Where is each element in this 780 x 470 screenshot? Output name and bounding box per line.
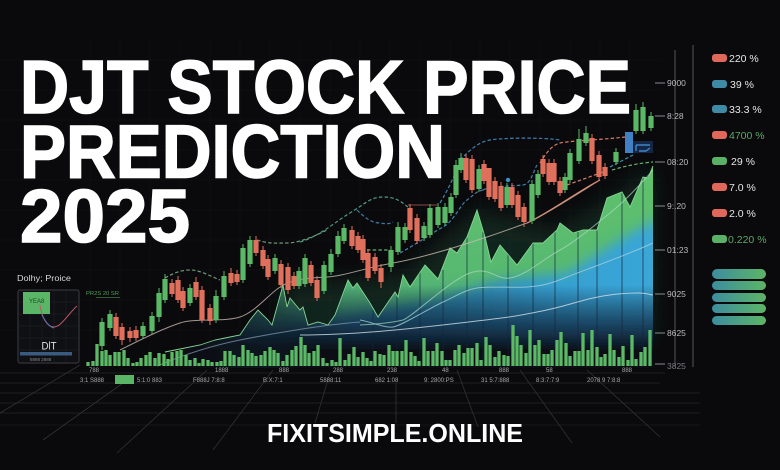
inset panel: DlT <box>42 340 57 352</box>
mini green label: PR2S 20 SR <box>86 291 119 297</box>
percentage legend: 220 % <box>729 53 759 65</box>
inset green box <box>23 292 50 314</box>
right axis: 9:.20 <box>667 201 686 211</box>
time axis labels: 788 <box>89 368 100 374</box>
time axis labels: 288 <box>333 368 344 374</box>
percentage legend: 4700 % <box>729 130 765 142</box>
right axis <box>655 45 693 371</box>
area chart <box>150 160 660 375</box>
chart <box>88 102 660 375</box>
gradient bars <box>712 269 766 325</box>
percentage legend: 29 % <box>731 156 755 168</box>
percentage legend: 0.220 % <box>728 234 767 246</box>
inset panel: 8888 2888 <box>30 357 52 362</box>
title: PREDICTION <box>20 110 445 194</box>
footer site name: FIXITSIMPLE.ONLINE <box>267 418 523 448</box>
time axis labels: 31 5:7:888 <box>481 378 510 384</box>
percentage legend: 33.3 % <box>729 104 762 116</box>
time axis green marker <box>115 375 134 384</box>
percentage legend: 7.0 % <box>729 182 756 194</box>
green candlesticks <box>102 102 651 350</box>
trend lines <box>120 137 653 366</box>
title: DJT STOCK PRICE <box>20 45 631 129</box>
time axis labels: 888 <box>622 368 633 374</box>
time axis labels: 238 <box>387 368 398 374</box>
title <box>20 45 631 258</box>
red candlesticks <box>116 134 605 345</box>
right axis: 9025 <box>667 289 686 299</box>
time axis labels: 2078 9 7:8:8 <box>587 378 621 384</box>
time axis labels: 3:1 S888 <box>80 378 105 384</box>
right axis: 8:28 <box>667 111 684 121</box>
time axis labels: 48 <box>442 368 449 374</box>
time axis labels: 9: 2800:PS <box>424 378 454 384</box>
time axis labels: 5888:11 <box>320 378 342 384</box>
inset title: Dolhy; Proice <box>17 273 71 283</box>
time axis labels: 682 1:08 <box>375 378 399 384</box>
time axis labels: 5:1:0 883 <box>137 378 163 384</box>
floor grid <box>0 40 700 453</box>
title: 2025 <box>20 174 190 258</box>
time axis labels: 8:3:7:7:9 <box>536 378 560 384</box>
time axis labels: 888 <box>499 368 510 374</box>
time axis labels: 1888 <box>215 368 229 374</box>
volume bars <box>88 325 650 366</box>
percentage legend: 2.0 % <box>729 208 756 220</box>
area glow <box>283 166 653 340</box>
blue marker box <box>506 132 653 182</box>
right axis: 01:23 <box>667 245 689 255</box>
right axis: 08:20 <box>667 157 689 167</box>
percentage legend <box>712 53 767 246</box>
inset panel <box>18 290 79 363</box>
time axis labels: 888 <box>279 368 290 374</box>
right axis: 9000 <box>667 78 686 88</box>
right axis: 3825 <box>667 361 686 371</box>
inset panel: YEA8 <box>29 299 45 305</box>
time axis labels: B:X:7:1 <box>263 378 283 384</box>
time axis labels: 58 <box>546 368 553 374</box>
percentage legend: 39 % <box>730 79 754 91</box>
right axis: 8625 <box>667 328 686 338</box>
time axis labels: F888J 7:8:8 <box>193 378 225 384</box>
time axis labels <box>80 368 633 384</box>
